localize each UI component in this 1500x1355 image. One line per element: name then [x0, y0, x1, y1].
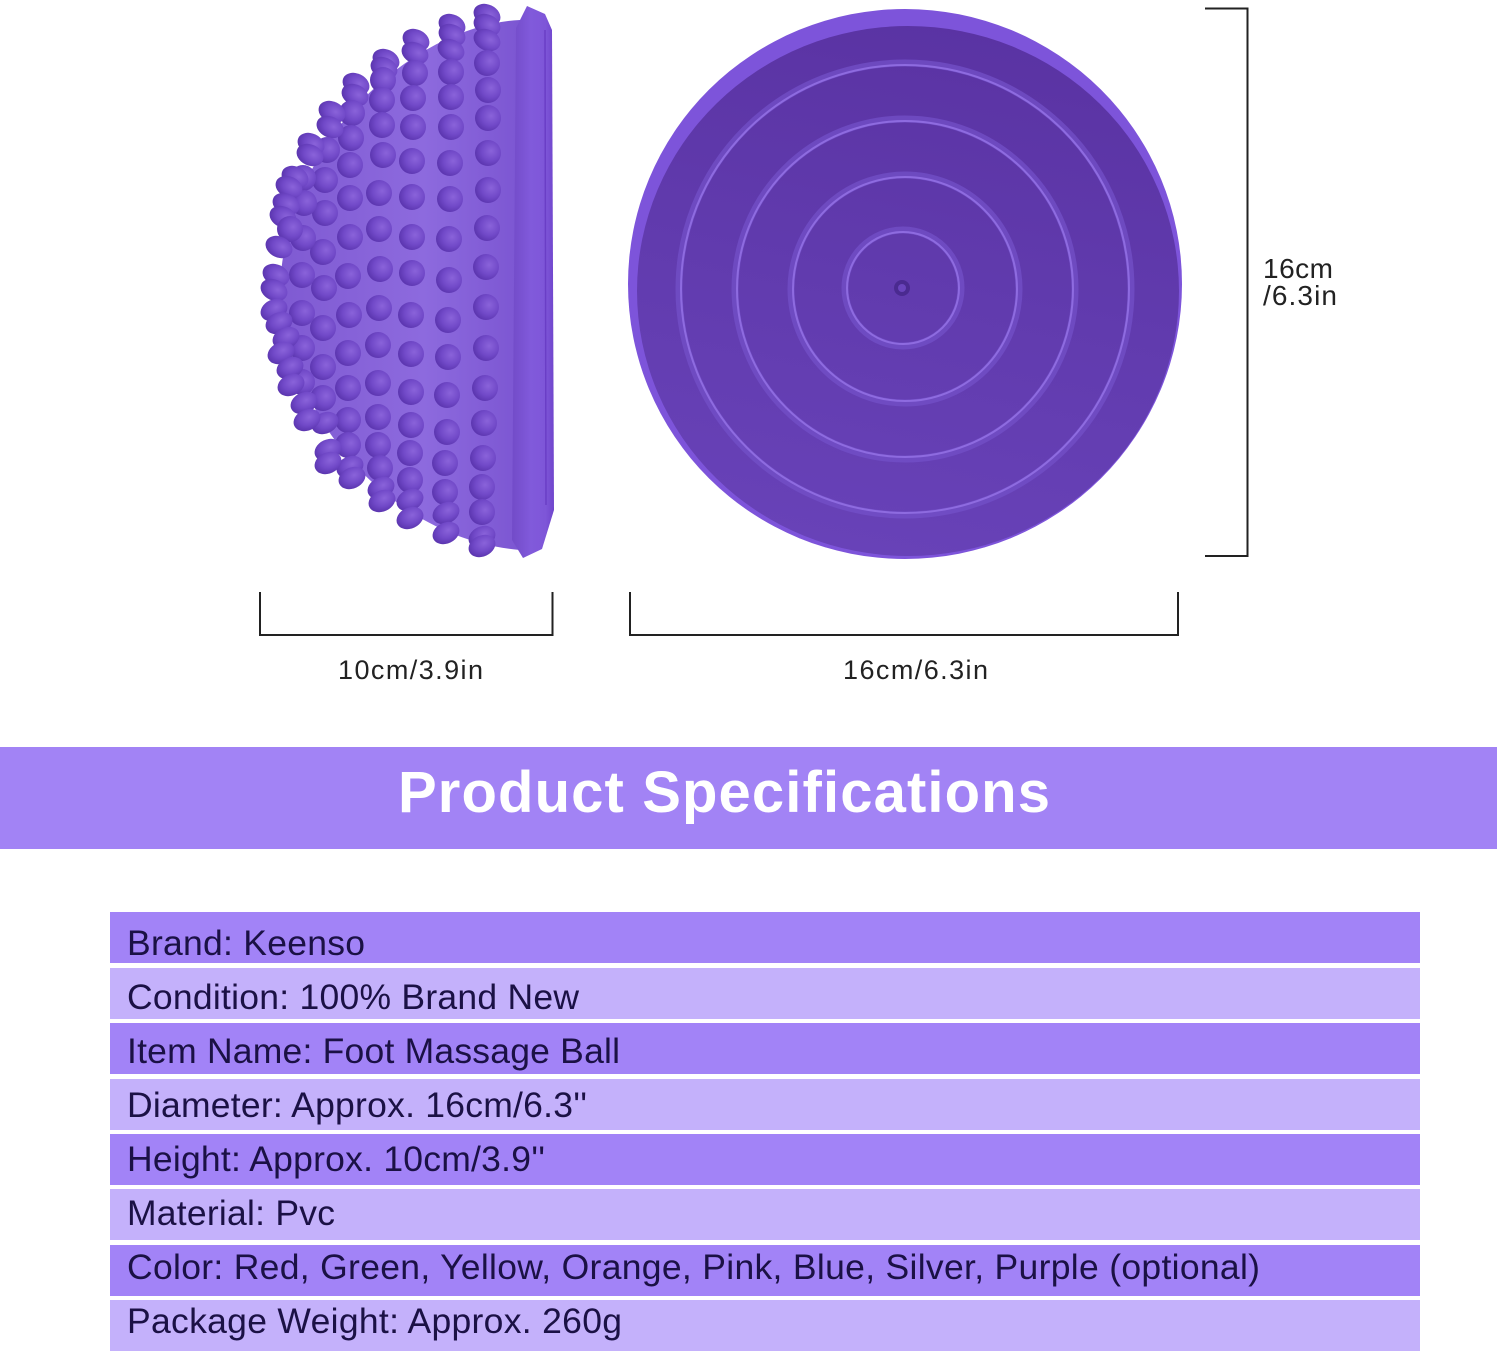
- row: diameter: Diameter: Approx. 16cm/6.3'': [127, 1085, 587, 1125]
- row: brand: [110, 912, 1420, 963]
- dimension label: disc diameter: 16cm/6.3in: [843, 655, 988, 685]
- row: item name: [110, 1023, 1420, 1074]
- ball flat rim: [512, 6, 554, 558]
- row: color: [110, 1245, 1420, 1296]
- row: condition: Condition: 100% Brand New: [127, 977, 579, 1017]
- banner: product specifications: [0, 747, 1497, 849]
- disc inner face: [637, 26, 1179, 556]
- product photo: half ball side view: [257, 0, 554, 561]
- dimension bracket: disc diameter: [630, 592, 1178, 635]
- row: package weight: Package Weight: Approx. 260g: [127, 1301, 622, 1341]
- dimension label: disc height: [1263, 253, 1337, 311]
- row: package weight: [110, 1300, 1420, 1351]
- title: Product Specifications: [398, 760, 1050, 825]
- row: material: [110, 1189, 1420, 1240]
- dimension label: ball height: 10cm/3.9in: [338, 655, 483, 685]
- dimension label: disc height: 16cm: [1263, 253, 1333, 284]
- concentric rings: [679, 63, 1131, 515]
- dimension bracket: disc height: [1205, 8, 1248, 556]
- disc outer rim: [628, 9, 1182, 559]
- row: condition: [110, 968, 1420, 1019]
- row: material: Material: Pvc: [127, 1193, 335, 1233]
- rim edge line: [545, 30, 546, 505]
- dimension label: disc height: /6.3in: [1263, 280, 1337, 311]
- product photo: flat base of disc: [628, 9, 1182, 559]
- row: height: [110, 1134, 1420, 1185]
- dimension bracket: ball height: [260, 592, 552, 635]
- massage spikes: [257, 0, 504, 561]
- row: brand: Brand: Keenso: [127, 923, 365, 963]
- row: diameter: [110, 1079, 1420, 1130]
- valve hole: [894, 280, 910, 296]
- spec table: [110, 912, 1420, 1351]
- row: item name: Item Name: Foot Massage Ball: [127, 1031, 620, 1071]
- row: color: Color: Red, Green, Yellow, Orange, Pink, Blue, Silver, Purple (optional): [127, 1247, 1260, 1287]
- row: height: Height: Approx. 10cm/3.9'': [127, 1139, 545, 1179]
- ball dome body: [280, 20, 520, 550]
